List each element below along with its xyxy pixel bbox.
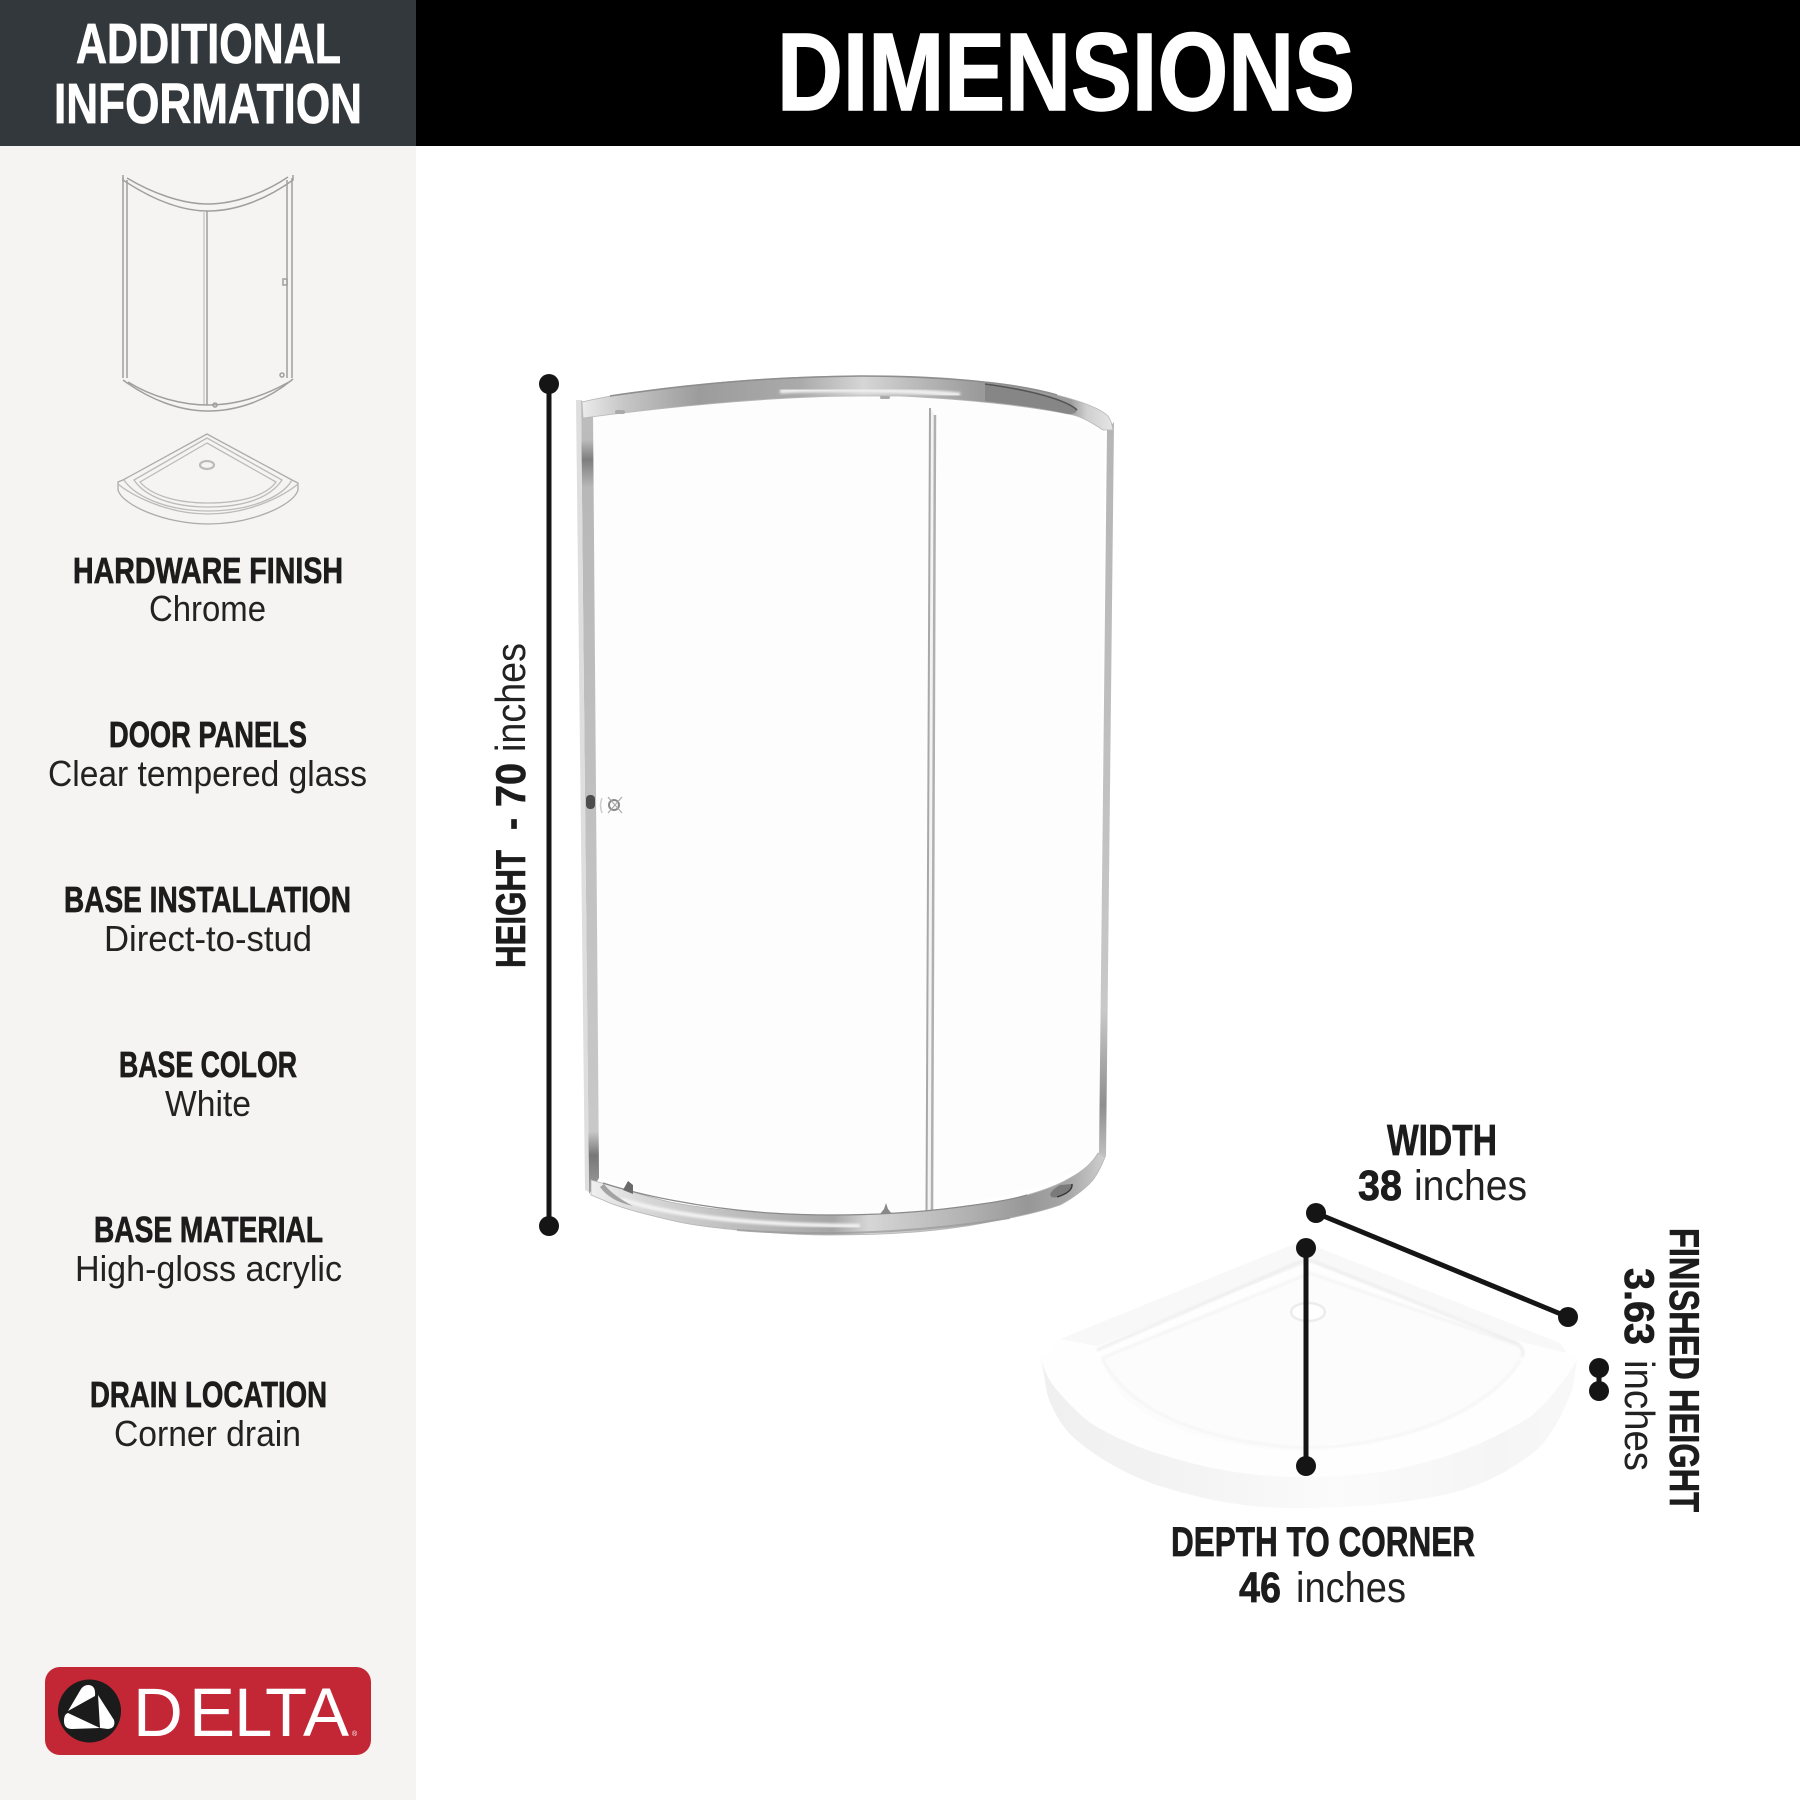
- base upper ledge: [1060, 1242, 1567, 1353]
- sidebar panel background: [0, 0, 416, 1800]
- logo: delta: [45, 1667, 371, 1755]
- dimension: height: -: [487, 818, 534, 830]
- spec: base material: [75, 1209, 342, 1289]
- base drain: [1291, 1303, 1325, 1321]
- dimension: height: [487, 374, 559, 1236]
- spec: door panels: DOOR PANELS: [109, 714, 307, 755]
- dimension: depth to corner: 46: [1239, 1564, 1281, 1612]
- title: dimensions: DIMENSIONS: [777, 11, 1355, 134]
- dimension: height: HEIGHT: [487, 850, 534, 968]
- title: dimensions: [416, 0, 1800, 146]
- dimension: width: inches: [1414, 1162, 1527, 1210]
- dimension: finished height: [1589, 1228, 1708, 1512]
- header: additional information: ADDITIONAL: [76, 12, 341, 76]
- icon: shower base line drawing: [118, 434, 298, 524]
- handle: [586, 795, 595, 809]
- dimension: finished height: 3.63: [1616, 1268, 1663, 1345]
- dimension: width: [1306, 1116, 1578, 1327]
- spec: base color: BASE COLOR: [119, 1044, 297, 1085]
- spec: door panels: [48, 714, 367, 794]
- right post: [1099, 422, 1114, 1157]
- spec: base material: High-gloss acrylic: [75, 1248, 342, 1289]
- dimension: height: 70: [487, 763, 534, 807]
- top rail: [582, 376, 1113, 430]
- roller fittings: [623, 1181, 633, 1194]
- dimension: depth to corner: DEPTH TO CORNER: [1171, 1518, 1475, 1565]
- spec: hardware finish: HARDWARE FINISH: [73, 550, 343, 591]
- spec: drain location: Corner drain: [114, 1413, 301, 1454]
- dimension: height: inches: [487, 643, 534, 752]
- center sliding door edges: [926, 408, 935, 1212]
- icon: shower enclosure line drawing: [123, 175, 293, 411]
- spec: door panels: Clear tempered glass: [48, 753, 367, 794]
- spec: base installation: Direct-to-stud: [104, 918, 312, 959]
- base basin: [1102, 1273, 1522, 1450]
- logo: delta: ®: [352, 1730, 358, 1738]
- spec: base material: BASE MATERIAL: [94, 1209, 323, 1250]
- dimension: depth to corner: [1171, 1238, 1475, 1612]
- header: additional information: [0, 0, 416, 146]
- glass: [593, 396, 1105, 1216]
- logo: delta: DELTA: [133, 1674, 349, 1751]
- header: additional information: INFORMATION: [54, 72, 362, 136]
- left post: [581, 400, 599, 1194]
- dimension: width: WIDTH: [1387, 1116, 1497, 1165]
- spec: base color: [119, 1044, 297, 1124]
- shower base: [1041, 1242, 1577, 1508]
- shower door enclosure: [576, 376, 1114, 1235]
- spec: hardware finish: [73, 550, 343, 629]
- base front skirt: [1041, 1358, 1577, 1508]
- dimension: finished height: inches: [1616, 1360, 1663, 1471]
- spec: drain location: [90, 1374, 327, 1454]
- top rail dark end cap: [985, 384, 1077, 414]
- spec: base installation: [64, 879, 351, 959]
- dimension: finished height: FINISHED HEIGHT: [1661, 1228, 1708, 1512]
- bottom rail: [591, 1153, 1105, 1235]
- dimension: depth to corner: inches: [1296, 1564, 1406, 1612]
- spec: base installation: BASE INSTALLATION: [64, 879, 351, 920]
- spec: hardware finish: Chrome: [149, 588, 266, 629]
- spec: base color: White: [165, 1083, 251, 1124]
- spec: drain location: DRAIN LOCATION: [90, 1374, 327, 1415]
- dimension: width: 38: [1358, 1162, 1402, 1210]
